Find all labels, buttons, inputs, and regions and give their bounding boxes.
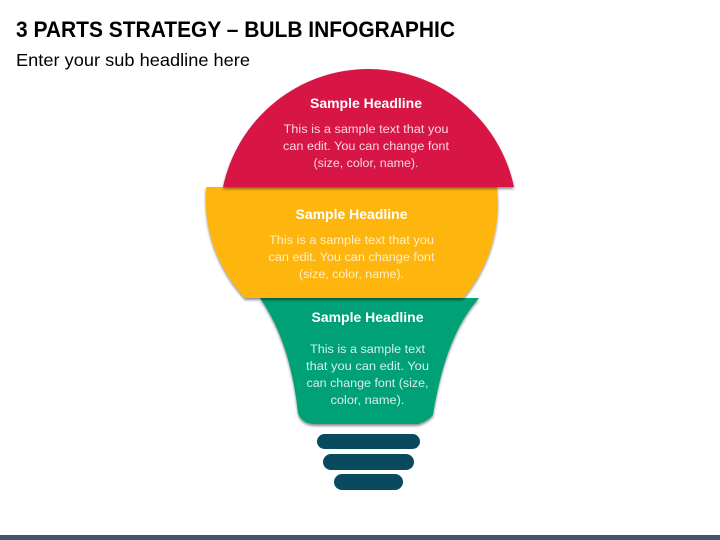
green body text: can change font (size, [306, 376, 428, 390]
red body text [283, 122, 450, 170]
panel: red bulb top [223, 69, 514, 187]
panel: green bulb neck [260, 298, 479, 424]
green body text [306, 342, 429, 407]
green body text: color, name). [330, 393, 404, 407]
yellow body text: This is a sample text that you [269, 233, 434, 247]
green headline: Sample Headline [312, 310, 424, 325]
icon: bulb base [317, 434, 420, 490]
yellow body text: (size, color, name). [299, 267, 404, 281]
footer bar [0, 535, 720, 540]
green body text: This is a sample text [310, 342, 426, 356]
red body text: This is a sample text that you [284, 122, 448, 136]
yellow body text: can edit. You can change font [268, 250, 435, 264]
subtitle: Enter your sub headline here [16, 50, 250, 70]
title: 3 PARTS STRATEGY – BULB INFOGRAPHIC [16, 17, 455, 42]
green body text: that you can edit. You [306, 359, 429, 373]
yellow headline: Sample Headline [296, 207, 408, 222]
red body text: (size, color, name). [314, 156, 418, 170]
panel: yellow bulb middle [206, 187, 498, 298]
red body text: can edit. You can change font [283, 139, 450, 153]
red headline: Sample Headline [310, 96, 423, 111]
yellow body text [268, 233, 435, 281]
